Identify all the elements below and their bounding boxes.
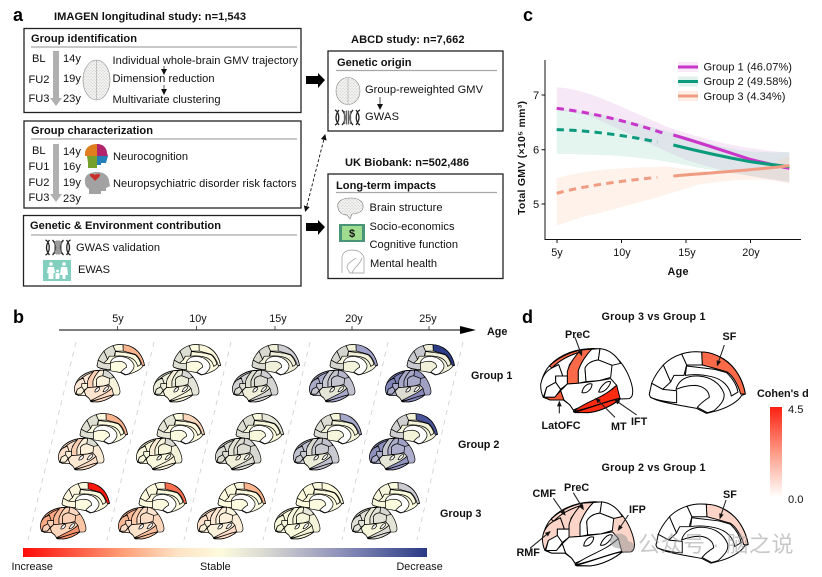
- icon: money: [339, 224, 365, 242]
- callouts: group 3 vs 1: PreC: [565, 329, 590, 341]
- panel: genetic and environment contribution: [24, 216, 301, 286]
- medial brain: group 2 vs 1: [656, 504, 748, 563]
- steps: Dimension reduction: [112, 73, 214, 85]
- colour legend: Increase: [12, 561, 53, 573]
- timepoints: 14y: [63, 53, 81, 65]
- axis: age: 10y: [189, 313, 207, 325]
- timepoints: FU3: [28, 192, 49, 204]
- axis: age: [59, 313, 507, 338]
- axis: age: 25y: [419, 313, 437, 325]
- panel letter a: a: [13, 5, 24, 25]
- steps: Multivariate clustering: [112, 94, 220, 106]
- x tick labels: [551, 247, 760, 259]
- icon: money: $: [349, 228, 355, 240]
- lateral brain: group 3 vs 1: [541, 349, 633, 413]
- colour legend: Stable: [200, 561, 231, 573]
- timepoints: FU2: [28, 74, 49, 86]
- items: Neuropsychiatric disorder risk factors: [113, 178, 297, 190]
- line: group 1: [557, 108, 789, 168]
- timepoints: [28, 53, 81, 105]
- timepoints: FU3: [28, 93, 49, 105]
- axes: [542, 60, 801, 243]
- heading: group 2 vs group 1: Group 2 vs Group 1: [602, 462, 706, 474]
- colour legend: Cohen's d: 4.5: [788, 404, 803, 416]
- x tick labels: 5y: [551, 247, 563, 259]
- heading: Genetic origin: [337, 57, 412, 69]
- colour legend: Cohen's d: Cohen's d: [757, 388, 809, 400]
- colour legend: Cohen's d: [757, 388, 809, 506]
- row labels: [440, 370, 512, 520]
- callouts: group 2 vs 1: RMF: [516, 547, 540, 559]
- line: group 3: [557, 166, 789, 193]
- colour legend: Cohen's d: 0.0: [788, 494, 803, 506]
- steps: Individual whole-brain GMV trajectory: [112, 55, 298, 67]
- arrow: dashed link: [306, 135, 325, 211]
- y tick labels: [533, 90, 539, 211]
- heading: Group identification: [31, 33, 137, 45]
- icon: brain: [336, 78, 360, 104]
- timepoints: 19y: [63, 73, 81, 85]
- heading: IMAGEN study: IMAGEN longitudinal study: n=1,543: [54, 11, 246, 23]
- timepoints: 19y: [63, 177, 81, 189]
- items: [370, 202, 458, 270]
- panel: long-term impacts: [328, 174, 503, 278]
- icon: brain: [83, 60, 110, 100]
- items: Group-reweighted GMV: [365, 84, 484, 96]
- heading: Long-term impacts: [336, 180, 436, 192]
- panel: group identification: [24, 28, 301, 112]
- icon: brain side view: [338, 198, 363, 219]
- timepoints: FU1: [28, 161, 49, 173]
- items: [113, 151, 297, 190]
- y axis title: Total GMV (×10⁵ mm³): [516, 101, 528, 215]
- brain pair: Group 2, 15y: [215, 414, 284, 470]
- panel a: study design: [13, 5, 503, 286]
- brain pair: Group 3, 25y: [351, 483, 420, 539]
- callouts: group 3 vs 1: SF: [722, 331, 737, 343]
- heading: UK Biobank: UK Biobank: n=502,486: [345, 157, 469, 169]
- EWAS text: EWAS: [78, 264, 110, 276]
- icon: family: [43, 260, 71, 281]
- icon: head with heart: [85, 172, 110, 194]
- panel letter d: d: [522, 307, 533, 327]
- axis: age: Age: [487, 326, 507, 338]
- line: group 2: [557, 130, 789, 167]
- arrow: to UK Biobank: [306, 220, 325, 235]
- legend: Group 2 (49.58%): [704, 76, 792, 88]
- watermark: 公众号 · 脑之说: [638, 532, 794, 557]
- panel d: Cohen's d brain maps: [516, 307, 809, 566]
- legend: [678, 62, 792, 103]
- row labels: Group 2: [458, 439, 499, 451]
- callouts: group 3 vs 1: LatOFC: [542, 420, 581, 432]
- panel: genetic origin: [328, 51, 503, 131]
- brain pair: Group 1, 20y: [309, 345, 378, 402]
- timepoints: 23y: [63, 93, 81, 105]
- arrow: to ABCD: [306, 73, 325, 88]
- colour legend: [12, 548, 443, 573]
- panel letter c: c: [523, 5, 533, 25]
- brain pair: Group 1, 10y: [153, 345, 221, 402]
- timepoints: 14y: [63, 146, 81, 158]
- brain pair: Group 3, 15y: [197, 483, 266, 539]
- x axis title: Age: [668, 266, 688, 278]
- callouts: group 2 vs 1: [516, 482, 737, 559]
- items: Mental health: [370, 258, 437, 270]
- panel c: line chart: [516, 5, 801, 278]
- callouts: group 3 vs 1: MT: [611, 421, 627, 433]
- panel: group characterization: [24, 121, 301, 208]
- y tick labels: 6: [533, 144, 539, 156]
- brain pair: Group 1, 15y: [232, 345, 300, 402]
- steps: [112, 55, 298, 106]
- timepoints: 23y: [63, 193, 81, 205]
- brain pair: Group 2, 20y: [293, 414, 362, 470]
- x tick labels: 20y: [742, 247, 760, 259]
- icon: puzzle head: [85, 144, 108, 168]
- timepoints: FU2: [28, 177, 49, 189]
- callouts: group 3 vs 1: IFT: [631, 416, 648, 428]
- brain pair: Group 3, 10y: [118, 483, 187, 539]
- items: GWAS: [365, 111, 399, 123]
- y tick labels: 5: [533, 199, 539, 211]
- panel letter b: b: [13, 307, 24, 327]
- row labels: Group 1: [471, 370, 512, 382]
- brain pair: Group 2, 25y: [369, 414, 438, 470]
- timepoints: BL: [32, 145, 46, 157]
- heading: Genetic & Environment contribution: [30, 220, 221, 232]
- axis: age: 5y: [112, 313, 124, 325]
- items: [365, 84, 484, 123]
- y tick labels: 7: [533, 90, 539, 102]
- heading: ABCD study: ABCD study: n=7,662: [351, 34, 464, 46]
- brain pair: Group 1, 5y: [74, 345, 145, 402]
- arrow: time: [50, 51, 62, 106]
- items: Socio-economics: [370, 221, 455, 233]
- brain pair: Group 1, 25y: [385, 345, 455, 402]
- icon: DNA: [335, 110, 360, 125]
- callouts: group 2 vs 1: IFP: [629, 504, 646, 516]
- heading: group 3 vs group 1: Group 3 vs Group 1: [602, 311, 706, 323]
- legend: Group 3 (4.34%): [704, 91, 786, 103]
- medial brain: group 3 vs 1: [649, 352, 745, 413]
- items: Cognitive function: [370, 239, 458, 251]
- arrow: time: [50, 144, 62, 202]
- timepoints: [28, 145, 81, 205]
- axis: age: 15y: [269, 313, 287, 325]
- brain pair: Group 2, 10y: [136, 414, 205, 470]
- heading: Group characterization: [31, 125, 153, 137]
- lateral brain: group 2 vs 1: [542, 502, 634, 566]
- items: Brain structure: [370, 202, 442, 214]
- timepoints: BL: [32, 53, 46, 65]
- callouts: group 2 vs 1: PreC: [564, 482, 589, 494]
- x tick labels: 10y: [613, 247, 631, 259]
- brain pair: Group 2, 5y: [58, 414, 128, 470]
- axis: age: 20y: [345, 313, 363, 325]
- icon: head in hand: [342, 250, 364, 273]
- legend: Group 1 (46.07%): [704, 62, 792, 74]
- GWAS validation text: GWAS validation: [76, 242, 160, 254]
- panel b: brain maps over age: [12, 307, 512, 573]
- brain pair: Group 3, 20y: [274, 483, 344, 539]
- items: Neurocognition: [113, 151, 188, 163]
- callouts: group 2 vs 1: SF: [723, 489, 737, 501]
- icon: DNA: [46, 240, 70, 255]
- row labels: Group 3: [440, 508, 481, 520]
- callouts: group 3 vs 1: [542, 329, 737, 433]
- x tick labels: 15y: [678, 247, 696, 259]
- callouts: group 2 vs 1: CMF: [532, 488, 556, 500]
- colour legend: Decrease: [396, 561, 443, 573]
- timepoints: 16y: [63, 161, 81, 173]
- confidence bands: [557, 87, 789, 226]
- brain pair: Group 3, 5y: [40, 483, 110, 539]
